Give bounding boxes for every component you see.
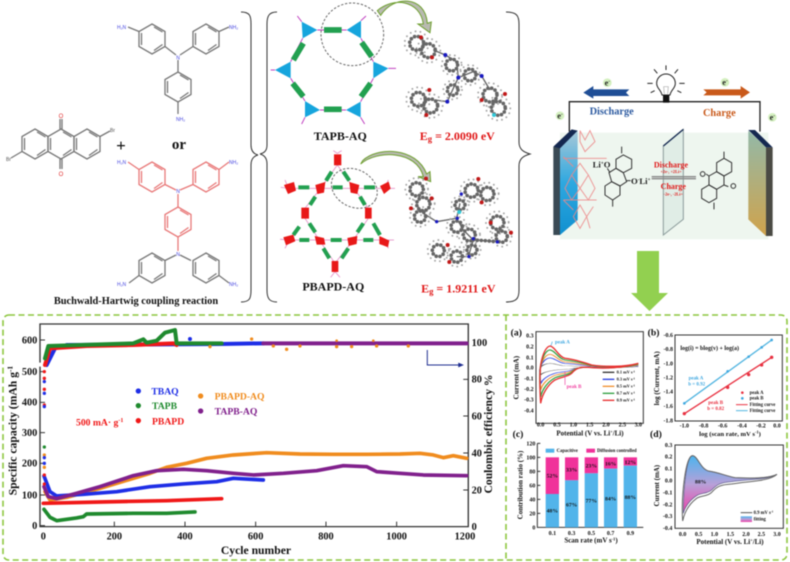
separator [663, 129, 683, 235]
y tick labels: 120 [526, 441, 535, 447]
peak labels: peak A [555, 340, 570, 345]
network: PBAPD-AQ star [280, 151, 395, 277]
outer CV curve [682, 456, 777, 521]
dashed circle: magnified region [321, 3, 384, 66]
axes [675, 445, 783, 528]
left axis tick labels: 400 [22, 398, 37, 409]
legend: PBAPD-AQ [215, 391, 265, 402]
label: TAPB-AQ band gap: g [428, 134, 433, 144]
electron labels: e [605, 78, 608, 87]
x axis tick labels: 400 [177, 531, 193, 542]
y tick labels: 0.2 [526, 345, 534, 351]
x tick labels [549, 531, 634, 537]
y tick labels: 0 [532, 525, 535, 531]
left axis tick labels: 300 [22, 428, 37, 439]
molecule: TAPB monomer: NH₂ [229, 25, 238, 31]
legend: 0.9 mV s [754, 511, 771, 516]
panel letter d: (d) [650, 429, 662, 440]
brace: third right brace [506, 12, 530, 302]
legend: TAPB-AQ [215, 406, 258, 417]
x tick labels: 2.0 [742, 532, 750, 538]
x axis title: log (scan rate, mV s [699, 431, 755, 438]
caption: coupling reaction: Buchwald-Hartwig coupling reaction [54, 296, 218, 307]
molecule: dibromoanthraquinone: O [59, 114, 64, 120]
bar value labels: 48% [547, 509, 558, 515]
x tick labels: 0.0 [773, 424, 781, 430]
y tick labels: -0.6 [664, 333, 673, 339]
panel: monomers and coupling reaction [6, 24, 238, 307]
axis title: specific capacity: Specific capacity (mAh g [7, 372, 20, 495]
legend: 0.9 mV s [617, 398, 633, 403]
label: PBAPD-AQ band gap: E [421, 281, 429, 295]
x tick labels: -0.2 [756, 424, 766, 430]
y tick labels: 0.0 [526, 366, 534, 372]
legend: fitting [754, 518, 766, 523]
y tick labels: -0.4 [524, 408, 534, 414]
labels: lithium oxygen: + [648, 178, 651, 183]
x axis title: ) [615, 537, 618, 545]
molecule: PBAPD monomer: N [176, 252, 180, 258]
x tick labels: 3.0 [773, 532, 781, 538]
fit lines and points [683, 339, 773, 415]
axis title: cycle number: Cycle number [221, 544, 291, 557]
molecule: TAPB monomer: H₂N [117, 25, 127, 31]
reaction arrows [652, 177, 696, 179]
bar value labels: 88% [625, 495, 636, 501]
y tick labels: 0.1 [665, 467, 672, 473]
right axis tick labels: 100 [472, 338, 487, 349]
bar value labels: 33% [566, 467, 578, 473]
y tick labels: -1.6 [664, 404, 673, 410]
legend [603, 369, 636, 403]
bar value labels: 84% [605, 496, 617, 502]
electron labels: e [770, 113, 773, 122]
axis title: specific capacity: -1 [6, 366, 15, 372]
axes [40, 324, 468, 527]
brace: second left brace [260, 12, 277, 302]
label: PBAPD-AQ: PBAPD-AQ [302, 280, 364, 294]
y tick labels: 80 [529, 469, 535, 475]
y tick labels: 0.2 [665, 455, 672, 461]
right axis tick labels: 0 [472, 522, 477, 533]
reaction labels [654, 160, 689, 196]
annotation: peak A: peak A [689, 376, 703, 381]
plus sign: + [116, 136, 126, 155]
x axis title: Scan rate (mV s [564, 537, 612, 545]
arrow: charge electron flow [703, 86, 750, 99]
electron labels: - [608, 79, 610, 84]
left axis tick labels: 0 [32, 521, 37, 532]
x tick labels: 1.0 [711, 532, 718, 538]
y tick labels: 0.1 [526, 355, 534, 361]
x axis tick labels: 200 [107, 531, 122, 542]
axis titles: Current (mA) [511, 355, 520, 399]
legend: 0.3 mV s [617, 377, 633, 382]
legend: Fitting curve [750, 409, 775, 414]
legend: TAPB [152, 401, 178, 412]
series: capacity curves [43, 453, 467, 521]
label: current density: -1 [118, 418, 123, 424]
x axis title: /Li) [752, 538, 764, 546]
y axis title: Contribution ratio (%) [516, 450, 524, 519]
y tick labels [526, 441, 535, 531]
right axis tick labels [472, 338, 487, 533]
legend: peak B [750, 397, 763, 402]
annotation: peak B: b = 0.82 [707, 407, 725, 412]
labels: lithium oxygen: - [638, 178, 640, 183]
molecule: PBAPD monomer: N [176, 189, 180, 195]
label: TAPB-AQ: TAPB-AQ [314, 129, 367, 143]
x tick labels: 0.3 [568, 531, 575, 537]
electron labels: - [726, 79, 728, 84]
y tick labels: 0.3 [665, 443, 672, 449]
x tick labels: 3.0 [635, 423, 642, 429]
x tick labels: 0.1 [549, 531, 556, 537]
legend: PBAPD [152, 416, 184, 427]
x tick labels: 0.5 [553, 423, 561, 429]
x tick labels [537, 423, 642, 429]
x tick labels [680, 424, 781, 430]
y tick labels: -1.8 [664, 418, 673, 424]
electron labels: - [773, 114, 775, 119]
x tick labels: 1.5 [586, 423, 593, 429]
molecule: TAPB monomer [117, 24, 238, 123]
left axis tick labels: 100 [22, 490, 37, 501]
separator top edge [663, 129, 683, 146]
series: early and scattered points [43, 337, 410, 486]
y tick labels: 40 [529, 497, 535, 503]
annotation: peak A: b = 0.92 [688, 382, 706, 387]
y tick labels: -0.3 [524, 398, 534, 404]
cell background [560, 133, 768, 239]
polymer network on electrode [563, 131, 607, 228]
network: TAPB-AQ hexagon [271, 16, 396, 124]
peak labels [551, 340, 582, 390]
y tick labels: 20 [529, 511, 535, 517]
x tick labels: -0.8 [699, 424, 708, 430]
y tick labels: 60 [529, 483, 535, 489]
x axis title: -1 [612, 536, 615, 541]
y tick labels: -0.1 [524, 376, 534, 382]
label: TAPB-AQ band gap: E [420, 129, 428, 143]
x axis tick labels: 1000 [386, 531, 407, 542]
molecule: PBAPD-AQ model [405, 177, 513, 267]
left electrode [553, 129, 578, 235]
molecule: PBAPD monomer [117, 160, 238, 288]
x tick labels: -0.4 [737, 424, 747, 430]
panel: battery schematic [553, 65, 777, 239]
bar value labels: 23% [586, 464, 597, 470]
x tick labels: -1.0 [680, 424, 689, 430]
legend: Fitting curve [750, 403, 775, 408]
panel: dashed outline [3, 315, 787, 560]
label: 88 percent: 88% [695, 479, 707, 485]
x axis tick labels [41, 531, 475, 542]
x axis title: /Li) [612, 429, 624, 437]
x axis title: + [750, 538, 753, 543]
left axis tick labels [22, 335, 37, 532]
panel: PBAPD-AQ structure [280, 151, 513, 296]
molecule: dibromoanthraquinone: Br [6, 157, 11, 163]
molecule: PBAPD monomer: H₂N [117, 160, 127, 166]
y axis title: log (Current, mA) [653, 351, 661, 405]
electron labels: e [557, 111, 561, 120]
molecule: PBAPD monomer: H₂N [117, 282, 127, 288]
right axis tick labels: 60 [472, 411, 482, 422]
legend [546, 449, 637, 454]
word: or: or [172, 137, 186, 153]
legend: -1 [633, 383, 636, 387]
molecule: dibromoanthraquinone: Br [110, 128, 115, 134]
x tick labels: 2.5 [758, 532, 765, 538]
bar value labels: 52% [547, 474, 558, 480]
x axis title: ) [759, 431, 761, 438]
left axis tick labels: 500 [22, 367, 37, 378]
legend: Capacitive [557, 449, 578, 454]
x axis title: Potential (V vs. Li [556, 429, 610, 437]
annotation: peak B: peak B [708, 401, 723, 406]
chart (a): cyclic voltammetry [511, 328, 643, 437]
y tick labels: -1.4 [664, 390, 673, 396]
label: PBAPD-AQ band gap: = 1.9211 eV [433, 281, 496, 295]
panel letter a: (a) [511, 328, 522, 339]
arrow: curved magnification arrow [361, 151, 431, 182]
bar value labels: 16% [605, 461, 617, 467]
panel: TAPB-AQ structure [271, 1, 510, 144]
legend: -1 [633, 397, 636, 401]
arrow: curved magnification arrow [377, 1, 431, 33]
arrow: discharge electron flow [583, 86, 629, 99]
x axis tick labels: 800 [318, 531, 334, 542]
chart (d): capacitive fitting [650, 429, 783, 546]
y tick labels: -0.2 [663, 502, 672, 508]
legend: -1 [633, 369, 636, 373]
x tick labels: 0.7 [607, 531, 614, 537]
right axis tick labels: 40 [472, 448, 482, 459]
reaction labels: Discharge [654, 160, 689, 169]
arrow: axis indicator [427, 350, 464, 367]
axis title: coulombic efficiency: Coulombic efficiency % [482, 374, 495, 494]
equation: log(i) = blog(v) + log(a) [680, 345, 739, 352]
x axis title: Potential (V vs. Li [696, 538, 750, 546]
brace: first right brace [241, 12, 258, 302]
reaction labels: -2e-, -2Li+ [664, 191, 683, 196]
y tick labels: -1.2 [664, 376, 673, 382]
y tick labels [664, 333, 673, 424]
molecule: TAPB monomer: NH₂ [176, 117, 185, 123]
y tick labels: -0.8 [664, 347, 673, 353]
molecule: dibromoanthraquinone [6, 114, 115, 178]
y tick labels: 0.0 [665, 479, 672, 485]
electron labels: - [561, 112, 563, 117]
molecule: PBAPD monomer: NH₂ [229, 160, 238, 166]
label: PBAPD-AQ band gap: g [429, 286, 434, 296]
panel letter c: (c) [513, 429, 523, 440]
label: current density: 500 mA· g [76, 417, 118, 428]
axes [536, 332, 643, 423]
reaction labels: +2e-, +2Li+ [660, 169, 682, 174]
y tick labels [663, 443, 672, 532]
left axis tick labels: 600 [22, 335, 37, 346]
legend [741, 510, 774, 523]
legend: -1 [633, 376, 636, 380]
label: Discharge: Discharge [590, 106, 634, 117]
molecule: reduced lithiated anthraquinone [605, 147, 632, 207]
axes [675, 335, 782, 421]
legend: -1 [771, 510, 774, 514]
icon: light bulb [647, 65, 685, 103]
series: coulombic efficiency curves [45, 330, 467, 365]
x axis tick labels: 1200 [455, 531, 475, 542]
label: Charge: Charge [703, 108, 736, 119]
legend: Diffusion controlled [597, 449, 637, 454]
arrow: big green down arrow [631, 251, 668, 311]
x tick labels: 0.9 [627, 531, 634, 537]
x axis title: + [610, 429, 613, 434]
labels: lithium oxygen [593, 159, 651, 186]
x tick labels: 0.5 [588, 531, 595, 537]
electron labels: e [722, 78, 726, 87]
legend [736, 391, 775, 414]
panel letter b: (b) [648, 328, 659, 339]
left axis tick labels: 200 [22, 459, 37, 470]
y tick labels [524, 334, 534, 414]
molecule: PBAPD monomer: NH₂ [229, 282, 238, 288]
x tick labels: 1.0 [570, 423, 577, 429]
x tick labels: 0.0 [537, 423, 544, 429]
y tick labels: -0.2 [524, 387, 534, 393]
x tick labels: 0.0 [679, 532, 686, 538]
peak labels: peak B [567, 385, 582, 390]
bar value labels: 12% [625, 460, 636, 466]
y tick labels: -1.0 [664, 361, 673, 367]
legend: peak A [750, 391, 764, 396]
right axis tick labels: 20 [472, 485, 482, 496]
x tick labels: 2.0 [602, 423, 610, 429]
x axis tick labels: 0 [41, 531, 46, 542]
molecule: TAPB-AQ model [405, 31, 510, 120]
reaction labels: Charge [661, 182, 686, 191]
legend: 0.5 mV s [617, 384, 633, 389]
labels: lithium oxygen: O [631, 176, 638, 186]
x axis tick labels: 600 [248, 531, 263, 542]
y axis title: Current (mA) [653, 464, 661, 506]
x tick labels [679, 532, 781, 538]
legend [136, 386, 265, 427]
legend: 0.1 mV s [617, 370, 633, 375]
electron labels [556, 78, 777, 122]
molecule: TAPB monomer: N [176, 56, 180, 62]
labels: lithium oxygen: Li [593, 159, 601, 169]
x axis title: -1 [755, 430, 759, 435]
legend: TBAQ [151, 386, 179, 397]
x tick labels: 2.5 [619, 423, 626, 429]
fitting area [683, 456, 777, 513]
y tick labels: -0.1 [663, 490, 672, 496]
bar value labels: 77% [586, 499, 597, 505]
stacked bars [546, 457, 637, 527]
y tick labels: 0.3 [526, 334, 534, 340]
dashed ellipse: magnified region [324, 161, 384, 216]
label: TAPB-AQ band gap: = 2.0090 eV [432, 129, 495, 143]
molecule: dibromoanthraquinone: O [59, 172, 64, 178]
axes [537, 443, 643, 527]
labels: lithium oxygen: Li [639, 176, 648, 186]
labels: lithium oxygen: O [604, 159, 611, 169]
chart: cycling performance [6, 324, 495, 557]
legend: -1 [633, 390, 636, 394]
bar value labels: 67% [566, 502, 578, 508]
x tick labels: 0.5 [695, 532, 702, 538]
right axis tick labels: 80 [472, 375, 482, 386]
molecule: anthraquinone [700, 152, 736, 209]
y tick labels: -0.3 [663, 514, 672, 520]
chart (c): contribution ratio bars [513, 429, 643, 545]
labels: lithium oxygen: + [601, 161, 604, 166]
circuit wire [569, 102, 760, 132]
x tick labels: -0.6 [718, 424, 727, 430]
y tick labels: -0.4 [663, 526, 672, 532]
chart (b): log-log fit [648, 328, 782, 438]
legend: 0.7 mV s [617, 391, 633, 396]
bar value labels [547, 460, 636, 515]
y tick labels: 100 [526, 455, 535, 461]
right electrode [748, 130, 773, 236]
x tick labels: 1.5 [727, 532, 734, 538]
CV curves [540, 346, 638, 403]
